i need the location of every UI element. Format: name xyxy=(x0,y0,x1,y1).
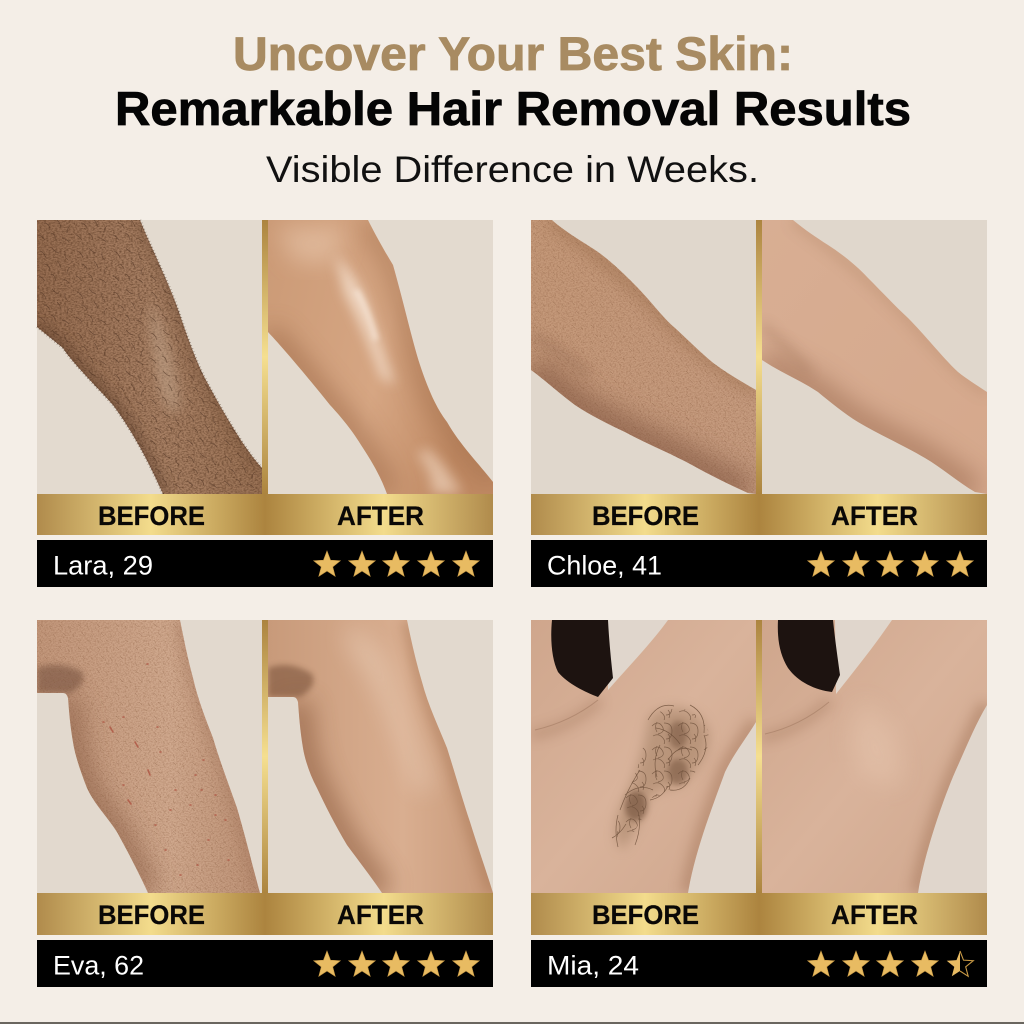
label: before: BEFORE xyxy=(98,900,205,930)
after photo: smooth calf xyxy=(268,620,493,893)
title line: gold: Uncover Your Best Skin: xyxy=(233,27,793,80)
label: after: AFTER xyxy=(337,501,424,531)
before photo: stubbled calf xyxy=(37,620,262,893)
name and rating bar xyxy=(531,940,987,987)
before/after gold bar xyxy=(37,494,493,535)
gold divider xyxy=(262,220,268,494)
four and a half star rating xyxy=(808,951,973,976)
panel: Lara xyxy=(37,220,493,587)
title block xyxy=(115,27,911,190)
name: Eva, 62 xyxy=(53,950,144,980)
label: after: AFTER xyxy=(831,900,918,930)
five star rating xyxy=(808,551,973,576)
subtitle: Visible Difference in Weeks. xyxy=(266,149,759,190)
name and rating bar xyxy=(531,540,987,587)
armpit hair xyxy=(612,705,708,850)
label: before: BEFORE xyxy=(592,501,699,531)
panel: Eva xyxy=(37,620,493,987)
name: Chloe, 41 xyxy=(547,550,662,580)
title line: black: Remarkable Hair Removal Results xyxy=(115,82,911,135)
after photo: smooth underarm xyxy=(762,620,987,893)
name: Mia, 24 xyxy=(547,950,639,980)
gold divider xyxy=(756,220,762,494)
panel: Chloe xyxy=(531,220,987,587)
before/after gold bar xyxy=(37,893,493,935)
label: before: BEFORE xyxy=(592,900,699,930)
before photo: hairy arm xyxy=(531,220,756,494)
panel: Mia xyxy=(531,620,987,987)
label: after: AFTER xyxy=(831,501,918,531)
before photo: underarm with hair xyxy=(531,620,756,893)
name: Lara, 29 xyxy=(53,550,153,580)
before/after gold bar xyxy=(531,494,987,535)
before/after gold bar xyxy=(531,893,987,935)
label: after: AFTER xyxy=(337,900,424,930)
name and rating bar xyxy=(37,940,493,987)
five star rating xyxy=(314,551,479,576)
before photo: hairy forearm xyxy=(37,220,262,494)
gold divider xyxy=(756,620,762,893)
after photo: smooth forearm xyxy=(268,220,493,494)
label: before: BEFORE xyxy=(98,501,205,531)
red stubble dots xyxy=(103,664,229,875)
five star rating xyxy=(314,951,479,976)
gold divider xyxy=(262,620,268,893)
after photo: smooth arm xyxy=(762,220,987,494)
name and rating bar xyxy=(37,540,493,587)
